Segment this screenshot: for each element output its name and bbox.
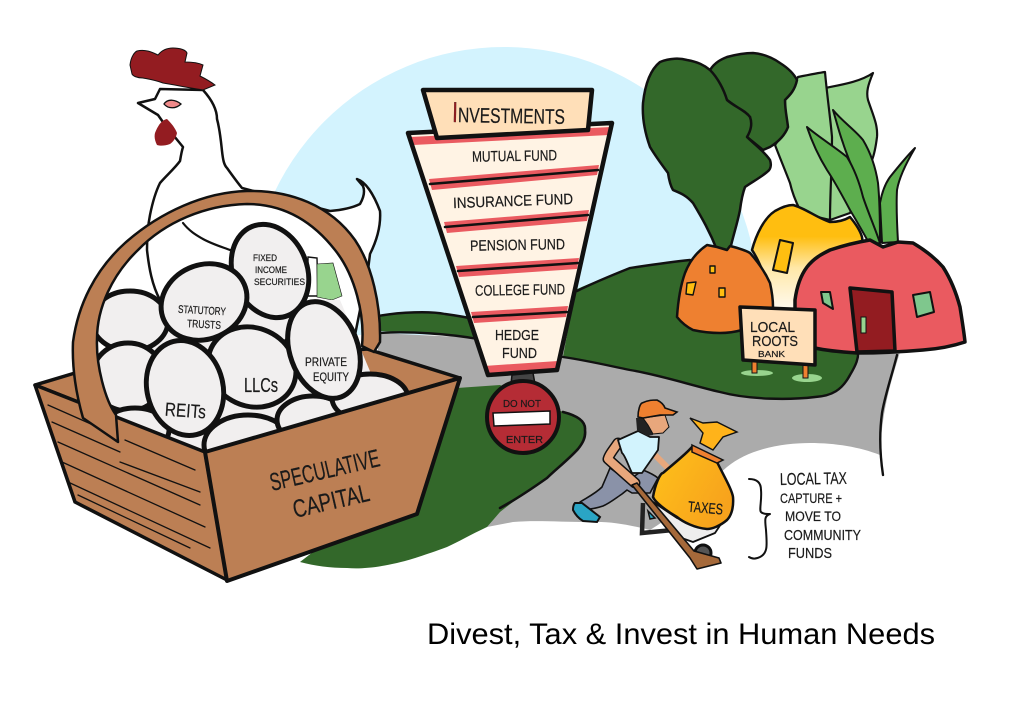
- sign text: BANK: [758, 350, 786, 359]
- lower hill outline: [500, 412, 585, 508]
- funnel labels: FUND: [502, 345, 537, 362]
- funnel title: INVESTMENTS: [452, 97, 565, 131]
- tax bag: [653, 447, 733, 529]
- cash stack: [308, 257, 342, 300]
- egg: REITs: REITs: [164, 400, 207, 423]
- egg: REITs: [137, 332, 233, 444]
- barrow handle: [632, 483, 721, 569]
- egg pile backing: [105, 300, 380, 452]
- funnel dividers: [430, 170, 598, 317]
- do not enter sign: [487, 373, 559, 453]
- hen eye: [164, 100, 181, 108]
- lower hill: [300, 385, 585, 568]
- egg: fixed income securities: SECURITIES: [254, 277, 305, 288]
- annotation: local tax capture: COMMUNITY: [784, 527, 861, 544]
- sign neck: [511, 373, 535, 384]
- radish leaves: [807, 110, 915, 245]
- sign: local roots bank: [740, 307, 822, 382]
- far shoe: [648, 511, 655, 519]
- funnel body: [408, 123, 612, 375]
- hair: [636, 418, 653, 436]
- sign text: DO NOT: [503, 398, 542, 410]
- basket back wall: [35, 349, 460, 452]
- basket label: [267, 444, 382, 524]
- window: [773, 240, 793, 273]
- sign posts: [752, 361, 808, 378]
- sign text: [750, 319, 798, 359]
- right hill: [563, 260, 860, 399]
- hen wattle: [155, 119, 177, 146]
- wheelbarrow stand: [642, 503, 673, 533]
- basket wood lines: [48, 405, 210, 548]
- sky circle: [275, 47, 754, 335]
- funnel header: [423, 90, 592, 138]
- funnel labels: MUTUAL FUND: [472, 147, 557, 166]
- egg: fixed income securities: INCOME: [255, 265, 287, 276]
- near shoe: [573, 503, 600, 522]
- carrot leaf back: [710, 53, 797, 150]
- sign text: ENTER: [506, 434, 543, 446]
- left hill: [375, 313, 480, 339]
- egg: LLCs: LLCs: [244, 375, 278, 397]
- radish windows: [821, 292, 934, 317]
- basket: [35, 378, 460, 581]
- egg: statutory trusts: [149, 250, 259, 354]
- funnel labels: [453, 147, 573, 362]
- hen body: [138, 89, 380, 360]
- trousers: [580, 468, 658, 509]
- annotation: local tax capture: FUNDS: [788, 545, 832, 562]
- carrot windows: [686, 266, 725, 297]
- person with wheelbarrow: [573, 400, 737, 569]
- radish door: [850, 288, 895, 352]
- hen wing line: [183, 223, 230, 250]
- sign board: [740, 307, 815, 365]
- sign text: [503, 398, 543, 446]
- cap: [638, 400, 677, 418]
- investments funnel: [408, 90, 612, 375]
- funnel labels: PENSION FUND: [470, 236, 565, 255]
- egg: fixed income securities: [218, 213, 322, 329]
- house: radish: [795, 110, 965, 353]
- leaves: light green: [775, 72, 877, 220]
- house: carrot: [643, 53, 797, 333]
- annotation: local tax capture: CAPTURE +: [780, 490, 842, 506]
- basket handle: [73, 191, 380, 442]
- bag collar: [692, 445, 723, 463]
- egg: private equity: [275, 291, 373, 409]
- hen: [130, 48, 380, 360]
- road: [378, 333, 900, 530]
- carrot leaf front: [643, 59, 771, 250]
- bag top: [690, 418, 737, 450]
- wheel: [695, 545, 711, 561]
- basket label: SPECULATIVE: [267, 444, 382, 497]
- title: Divest, Tax & Invest in Human Needs: [427, 618, 935, 651]
- annotation: local tax capture: LOCAL TAX: [780, 469, 847, 489]
- sign disc: [487, 381, 559, 453]
- egg: private equity: EQUITY: [313, 370, 349, 384]
- door handle: [861, 317, 866, 333]
- annotation: local tax capture: [780, 469, 861, 562]
- shirt: [618, 431, 659, 473]
- face: [643, 415, 669, 434]
- house: yellow squash: [752, 72, 877, 310]
- eggs: [92, 213, 408, 475]
- sign text: LOCAL: [750, 319, 795, 336]
- far arm: [655, 455, 670, 470]
- hen comb: [130, 48, 215, 90]
- egg: LLCs: [195, 313, 309, 421]
- barrow tray: [647, 498, 725, 542]
- carrot body: [677, 245, 773, 333]
- near arm outline: [608, 443, 635, 483]
- sign bar: [493, 411, 550, 426]
- egg: fixed income securities: FIXED: [253, 253, 277, 264]
- back eggs: [92, 291, 168, 351]
- egg: statutory trusts: STATUTORY: [178, 304, 227, 318]
- sign text: ROOTS: [752, 333, 798, 350]
- basket left face: [35, 385, 227, 580]
- dome: [752, 205, 870, 310]
- bag label: TAXES: [687, 499, 724, 519]
- annotation: local tax capture: MOVE TO: [785, 508, 841, 524]
- basket label: CAPITAL: [290, 479, 372, 524]
- egg: private equity: PRIVATE: [305, 355, 347, 369]
- brace: [749, 479, 770, 558]
- funnel labels: COLLEGE FUND: [475, 281, 565, 300]
- basket front face: [205, 378, 460, 581]
- radish body: [795, 240, 965, 353]
- funnel labels: INSURANCE FUND: [453, 191, 573, 212]
- funnel labels: HEDGE: [495, 327, 539, 344]
- road edge lines: [378, 260, 897, 475]
- near arm skin: [608, 443, 635, 483]
- grass tufts: [741, 370, 773, 376]
- funnel red bands: [410, 127, 611, 374]
- funnel outline: [408, 123, 612, 375]
- egg: statutory trusts: TRUSTS: [187, 318, 221, 332]
